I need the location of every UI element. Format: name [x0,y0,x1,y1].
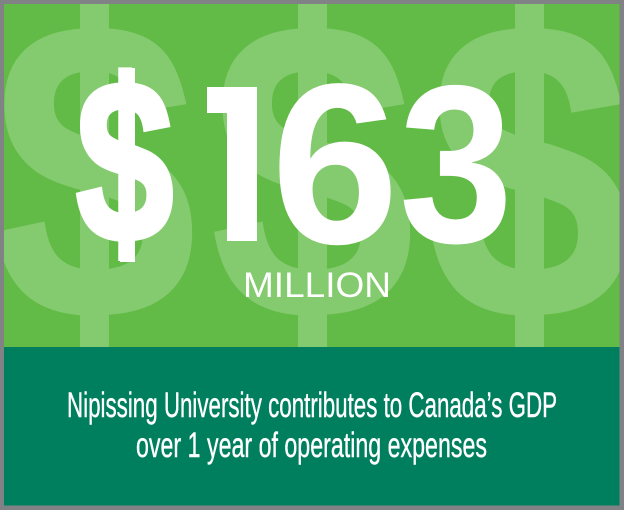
dollar glyph: $ [76,34,173,291]
big figure: $163 [76,67,506,262]
background dollar signs [4,4,620,347]
caption text [67,386,557,465]
digit 1: 1 [167,39,306,289]
digit 3: 3 [399,38,513,290]
digit 1 [207,87,257,241]
panel: dark green caption band [4,347,620,506]
digit 6: 6 [271,35,399,292]
panel: green top background [4,4,620,347]
label: MILLION: MILLION [243,266,391,305]
